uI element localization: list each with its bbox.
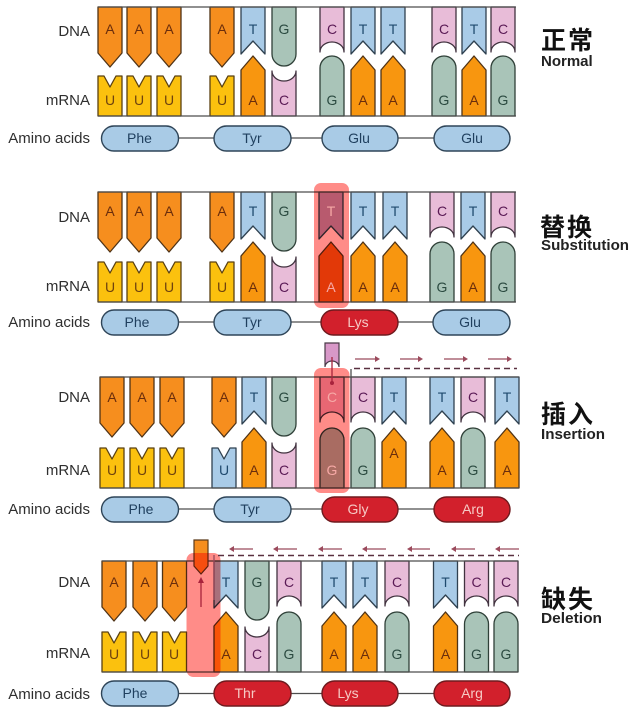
base letters: G: [279, 203, 289, 219]
DNA strand: A: [164, 21, 174, 37]
amino acid chain: Glu: [459, 314, 481, 330]
row labels: Amino acids: [8, 314, 90, 331]
amino acid chain: Phe: [123, 685, 148, 701]
base letters: C: [284, 574, 294, 590]
base letters: T: [359, 203, 368, 219]
base letters: [107, 389, 512, 478]
base letters: T: [441, 574, 450, 590]
base letters: A: [217, 203, 227, 219]
base letters: T: [391, 203, 400, 219]
row labels: mRNA: [46, 462, 90, 479]
mRNA strand: C: [279, 92, 289, 108]
row labels: DNA: [58, 209, 90, 226]
base letters: U: [219, 462, 229, 478]
amino acid chain: Gly: [348, 501, 368, 517]
base letters: G: [252, 574, 262, 590]
base letters: C: [471, 574, 482, 590]
panel: insertion: [8, 343, 605, 522]
base letters: C: [327, 389, 337, 405]
mRNA strand: [102, 612, 518, 672]
panel: substitution: [8, 183, 629, 335]
base letters: A: [360, 646, 370, 662]
amino acid chain: Phe: [125, 314, 150, 330]
mRNA strand: G: [439, 92, 449, 108]
title: deletion: 缺失: [541, 586, 595, 614]
panel: deletion: [8, 540, 602, 706]
mRNA strand: U: [134, 92, 144, 108]
DNA strand: T: [389, 21, 398, 37]
base letters: U: [167, 462, 177, 478]
title: substitution: Substitution: [541, 237, 629, 254]
title: deletion: [541, 586, 602, 627]
base letters: A: [248, 279, 258, 295]
base letters: G: [468, 462, 478, 478]
base letters: A: [326, 279, 336, 295]
base letters: T: [361, 574, 370, 590]
base letters: T: [249, 203, 258, 219]
row labels: DNA: [58, 23, 90, 40]
base letters: G: [471, 646, 482, 662]
row labels: Amino acids: [8, 130, 90, 147]
mRNA strand: [98, 56, 516, 116]
amino acid chain: Lys: [337, 685, 359, 701]
title: substitution: [540, 214, 629, 254]
arrow: base removed upward: [198, 577, 204, 607]
panel: normal: [8, 7, 595, 151]
amino acid chain: Tyr: [242, 130, 262, 146]
amino acid chain: [102, 310, 510, 335]
row labels: mRNA: [46, 278, 90, 295]
base letters: A: [441, 646, 451, 662]
base letters: A: [137, 389, 147, 405]
title: insertion: [541, 401, 605, 443]
base letters: T: [330, 574, 339, 590]
row labels: Amino acids: [8, 686, 90, 703]
base letters: U: [107, 462, 117, 478]
arrows: frame shift left: [214, 546, 519, 600]
amino acid chain: Arg: [462, 501, 484, 517]
base letters: G: [501, 646, 511, 662]
row labels: DNA: [58, 574, 90, 591]
amino acid chain: Lys: [347, 314, 369, 330]
mRNA strand: G: [327, 92, 337, 108]
base letters: C: [468, 389, 478, 405]
row labels: mRNA: [46, 92, 90, 109]
mRNA strand: [98, 242, 516, 302]
mRNA strand: A: [358, 92, 368, 108]
amino acid chain: Tyr: [242, 314, 262, 330]
base letters: A: [109, 574, 119, 590]
base letters: A: [389, 445, 399, 461]
base letters: T: [390, 389, 399, 405]
base letters: A: [390, 279, 400, 295]
mRNA strand: U: [105, 92, 115, 108]
title: insertion: Insertion: [541, 426, 605, 443]
DNA strand: C: [327, 21, 337, 37]
amino acid chain: Glu: [348, 130, 370, 146]
base letters: U: [217, 279, 227, 295]
base letters: A: [437, 462, 447, 478]
base letters: U: [134, 279, 144, 295]
icon: deleted base: [194, 540, 208, 574]
base letters: A: [329, 646, 339, 662]
base letters: A: [105, 203, 115, 219]
base letters: C: [358, 389, 368, 405]
highlight: substituted base pair: [314, 183, 349, 308]
base letters: T: [469, 203, 478, 219]
amino acid chain: Glu: [461, 130, 483, 146]
mRNA strand: G: [498, 92, 508, 108]
DNA strand: T: [470, 21, 479, 37]
mRNA strand: A: [469, 92, 479, 108]
base letters: U: [169, 646, 179, 662]
DNA strand: T: [359, 21, 368, 37]
amino acid chain: [102, 126, 510, 151]
base letters: A: [140, 574, 150, 590]
DNA strand: C: [439, 21, 449, 37]
row labels: [8, 209, 90, 331]
title: normal: 正常: [541, 27, 595, 55]
base letters: G: [392, 646, 402, 662]
amino acid chain: Phe: [129, 501, 154, 517]
base letters: G: [498, 279, 508, 295]
mRNA strand: U: [217, 92, 227, 108]
DNA strand: A: [134, 21, 144, 37]
base letters: T: [327, 203, 336, 219]
base letters: T: [503, 389, 512, 405]
base letters: U: [140, 646, 150, 662]
base letters: U: [137, 462, 147, 478]
base letters: C: [279, 279, 289, 295]
amino acid chain: [102, 497, 510, 522]
base letters: A: [219, 389, 229, 405]
amino acid chain: [102, 681, 510, 706]
base letters: U: [164, 279, 174, 295]
base letters: G: [327, 462, 337, 478]
arrows: frame shift right: [351, 356, 517, 378]
base letters: T: [250, 389, 259, 405]
base letters: C: [501, 574, 511, 590]
row labels: Amino acids: [8, 501, 90, 518]
mRNA strand: A: [248, 92, 258, 108]
amino acid chain: Thr: [234, 685, 256, 701]
row labels: [8, 574, 90, 703]
DNA strand: G: [279, 21, 289, 37]
base letters: A: [167, 389, 177, 405]
base letters: T: [222, 574, 231, 590]
base letters: C: [279, 462, 289, 478]
base letters: C: [437, 203, 447, 219]
base letters: C: [498, 203, 508, 219]
base letters: C: [392, 574, 402, 590]
icon: inserted base: [325, 343, 339, 385]
DNA strand: [102, 561, 518, 621]
base letters: U: [109, 646, 119, 662]
title: normal: Normal: [541, 53, 593, 70]
DNA strand: C: [498, 21, 508, 37]
row labels: [8, 389, 90, 518]
base letters: [109, 574, 511, 662]
title: substitution: 替换: [540, 214, 594, 242]
highlight: deleted base pair: [186, 553, 220, 677]
row labels: DNA: [58, 389, 90, 406]
base letters: A: [169, 574, 179, 590]
base letters: A: [134, 203, 144, 219]
title: deletion: Deletion: [541, 610, 602, 627]
amino acid chain: Arg: [461, 685, 483, 701]
base letters: A: [164, 203, 174, 219]
mRNA strand: U: [164, 92, 174, 108]
DNA strand: T: [249, 21, 258, 37]
base letters: G: [284, 646, 294, 662]
title: normal: [541, 27, 595, 70]
DNA strand: [98, 192, 516, 252]
base letters: G: [279, 389, 289, 405]
base letters: A: [249, 462, 259, 478]
DNA strand: A: [105, 21, 115, 37]
title: insertion: 插入: [541, 401, 595, 429]
base letters: A: [221, 646, 231, 662]
DNA strand: [100, 377, 519, 437]
mRNA strand: [100, 428, 519, 488]
base letters: G: [437, 279, 447, 295]
base letters: G: [358, 462, 368, 478]
DNA strand: [98, 7, 516, 67]
base letters: T: [438, 389, 447, 405]
mRNA strand: A: [388, 92, 398, 108]
amino acid chain: Phe: [127, 130, 152, 146]
base letters: U: [105, 279, 115, 295]
row labels: [8, 23, 90, 147]
highlight: inserted base pair: [314, 368, 350, 493]
base letters: [105, 203, 508, 295]
base letters: A: [502, 462, 512, 478]
base letters: C: [252, 646, 262, 662]
row labels: mRNA: [46, 645, 90, 662]
DNA strand: A: [217, 21, 227, 37]
amino acid chain: Tyr: [240, 501, 260, 517]
base letters: A: [107, 389, 117, 405]
base letters: A: [358, 279, 368, 295]
base letters: A: [468, 279, 478, 295]
